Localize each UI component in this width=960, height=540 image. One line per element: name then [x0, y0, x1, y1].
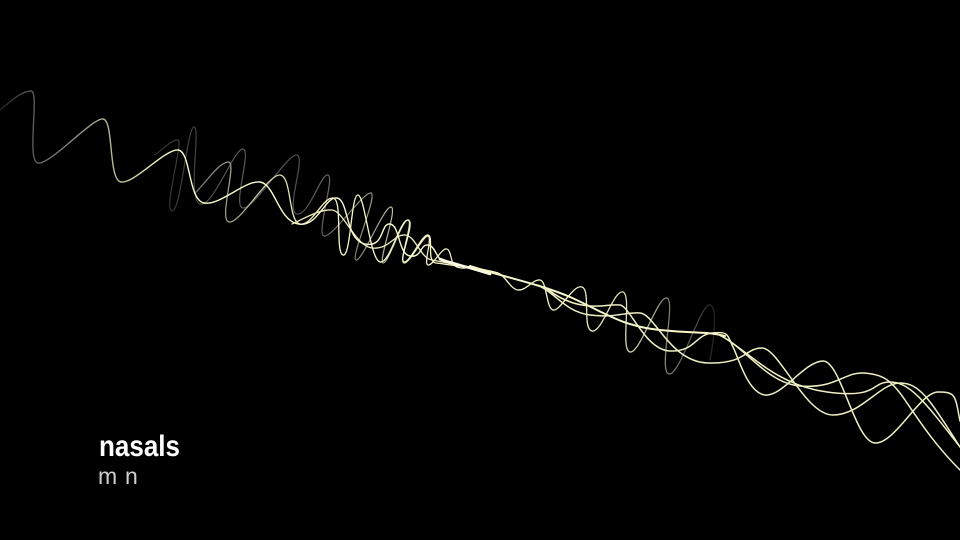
wave: lower frequency curve — [292, 210, 470, 267]
wave: high frequency faint curve — [155, 127, 470, 268]
waveforms: left of the convergence point — [0, 91, 490, 274]
wave: fading high frequency curve — [470, 266, 714, 374]
wave: fourth lower curve — [715, 333, 960, 470]
convergence knot — [440, 259, 490, 274]
wave: fifth lower curve — [720, 335, 960, 447]
wave: second central curve — [537, 285, 960, 447]
heading: nasals: nasals — [99, 430, 180, 463]
wave: main bright curve — [0, 91, 470, 267]
wave: medium frequency curve — [195, 162, 470, 267]
wave: third central curve — [545, 287, 960, 443]
waveforms: right of the convergence point — [470, 266, 960, 470]
phonemes: m n: m n — [98, 463, 138, 489]
caption — [98, 430, 180, 489]
wave: bright central trunk — [470, 266, 725, 336]
